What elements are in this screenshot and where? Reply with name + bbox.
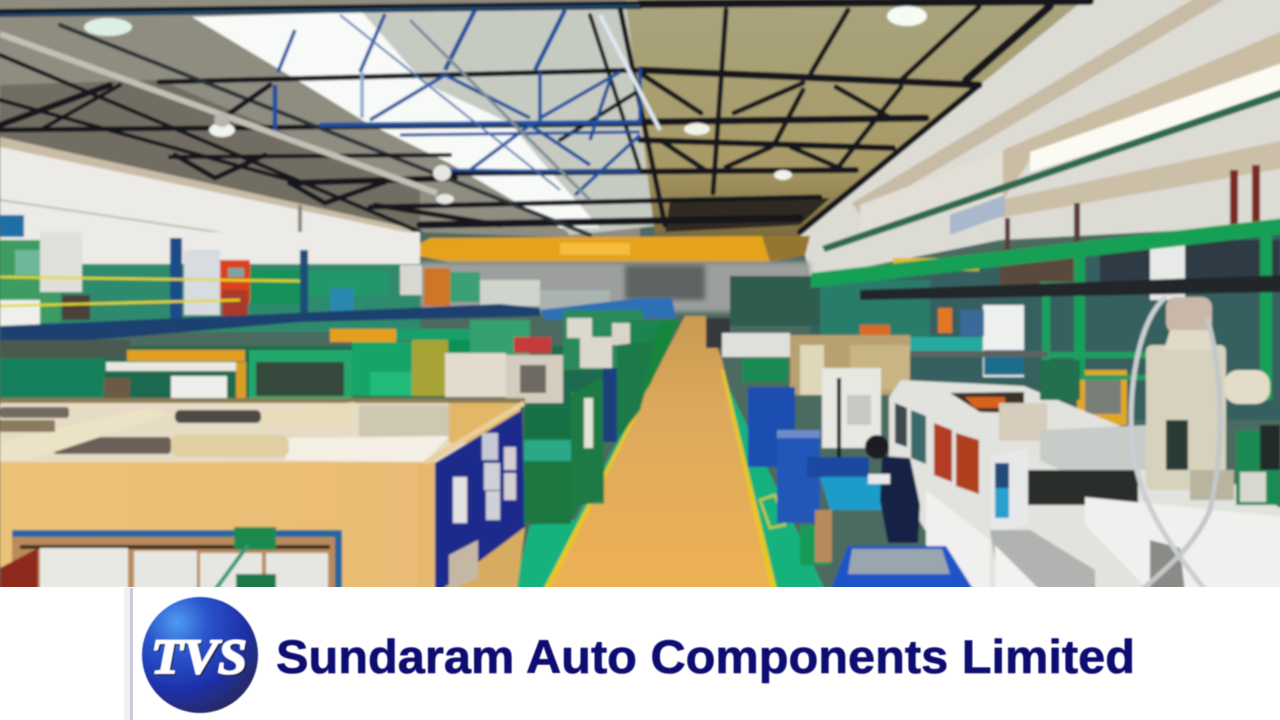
walkway: [545, 316, 776, 590]
ceiling trusses: blue: [0, 6, 660, 200]
icon: TVS globe logo: TVS: [153, 630, 249, 686]
left wall: [0, 146, 404, 234]
ceiling: left grey panels: [0, 0, 640, 240]
ceiling trusses: black: [0, 1, 1090, 235]
far end of hall: [420, 262, 810, 312]
ceiling: right tan panels: [625, 0, 1090, 238]
icon: TVS globe logo: [142, 597, 258, 713]
skylight: bright section: [192, 12, 600, 228]
machines far right backdrop: [730, 165, 1280, 425]
ceiling lights: [84, 6, 927, 204]
company name: Sundaram Auto Components Limited: [276, 630, 1135, 683]
green crates stack: [524, 320, 680, 524]
steam pipe: [0, 34, 437, 193]
machine rows left: [0, 310, 670, 406]
right aisle machines distant: [704, 317, 912, 458]
overhead crane: [412, 236, 810, 262]
worker at bench: [815, 435, 920, 562]
injection moulding machine: [889, 360, 1280, 592]
machines far left: [0, 215, 610, 332]
skylight: far panels: [350, 5, 665, 235]
logo banner: [0, 587, 1280, 720]
blue crates right: [748, 387, 869, 565]
icon: TVS globe logo: TVS: [151, 628, 247, 684]
right wall: [800, 0, 1280, 278]
blue pinboard: [425, 403, 525, 590]
hopper dryer: [1131, 297, 1280, 590]
notice board frame: [0, 527, 342, 590]
blue bin foreground: [830, 546, 975, 592]
blue gantry beam: [0, 302, 542, 341]
floor: green strip left + green strip right: [514, 316, 825, 590]
foreground yellow panel: [0, 462, 418, 592]
foreground machine booth: cream interior: [0, 398, 525, 464]
